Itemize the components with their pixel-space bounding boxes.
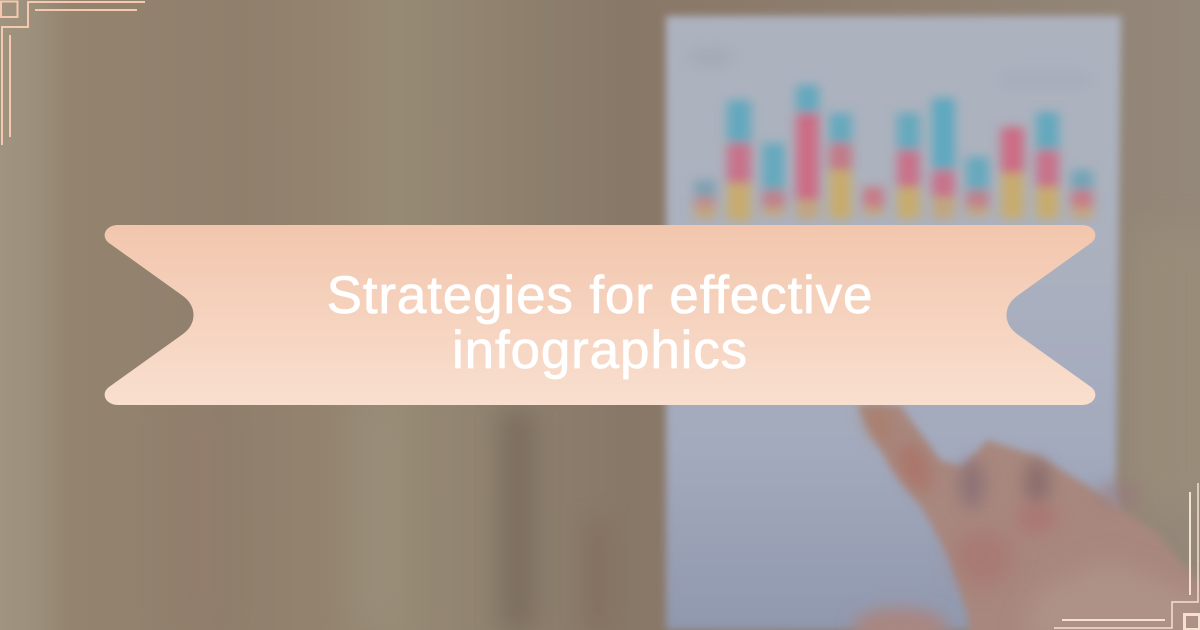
corner ornament: bottom right — [1054, 483, 1200, 630]
blurred hand pointing at chart — [852, 400, 1200, 630]
paper heading smudges — [690, 52, 1090, 84]
title: Strategies for effective — [327, 266, 873, 325]
blurred stacked bar chart — [694, 85, 1093, 221]
title — [327, 266, 873, 380]
title: infographics — [452, 321, 748, 380]
chart paper — [666, 16, 1130, 630]
corner ornament: top left — [0, 0, 145, 145]
